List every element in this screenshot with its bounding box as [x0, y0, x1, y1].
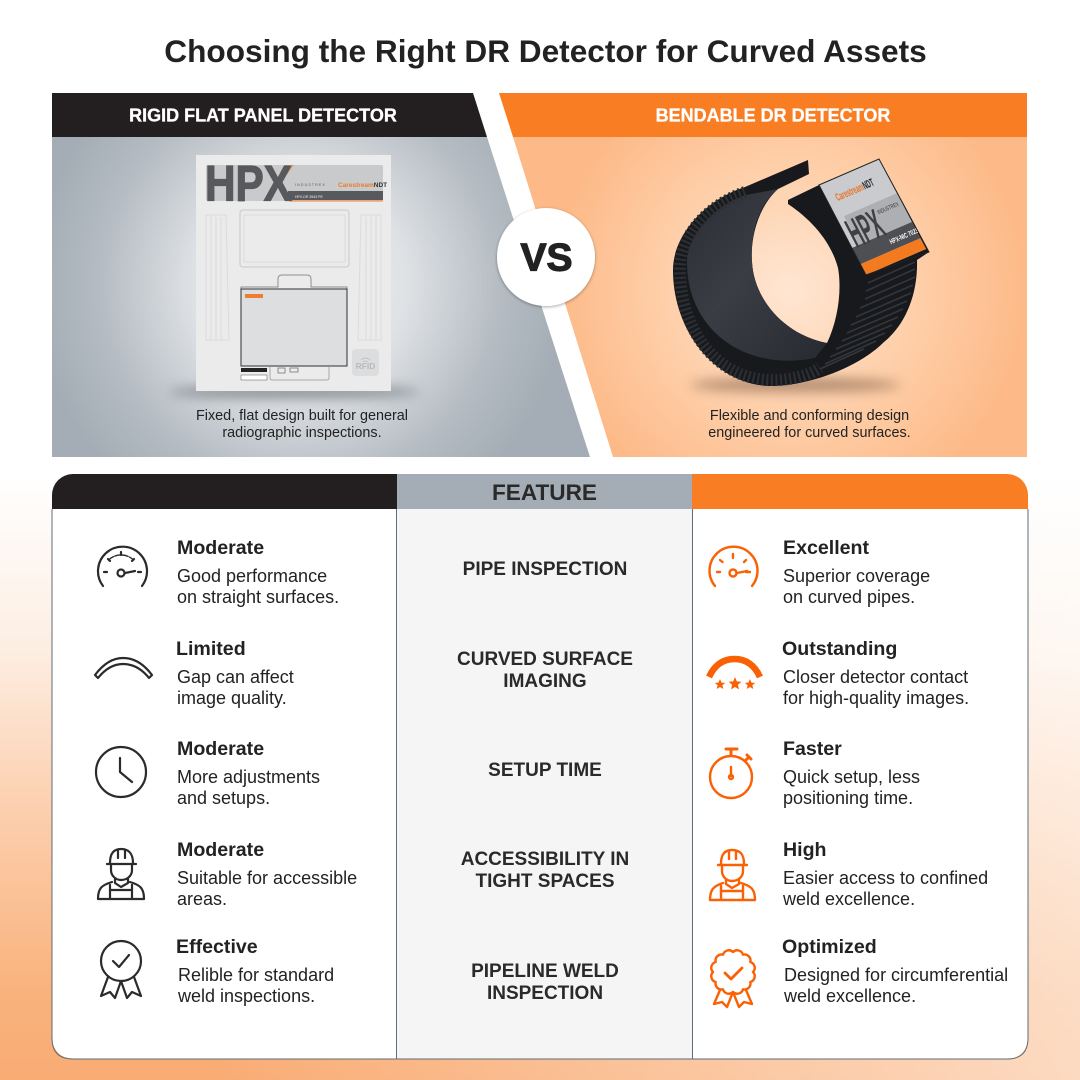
caption: rigid: Fixed, flat design built for general: [196, 408, 408, 424]
row: pipe inspection, bendable: Excellent: [783, 537, 870, 559]
row: pipe inspection, rigid: Good performance: [177, 566, 327, 586]
caption: rigid: [196, 408, 408, 441]
VS badge: [497, 208, 595, 306]
icon: award ribbon: [101, 941, 141, 998]
feature labels: PIPELINE WELD: [471, 961, 619, 982]
row: pipeline weld, rigid: Effective: [176, 936, 258, 958]
icon: orange arc with stars: [709, 659, 760, 689]
RFID badge: RFID: [356, 361, 375, 371]
detector module card: CarestreamNDT: [833, 175, 876, 203]
row: curved surface, bendable: Outstanding: [782, 638, 897, 660]
HPX label band: HPX-DR 3543 PE: [295, 195, 323, 199]
row: pipe inspection, rigid: Moderate: [177, 537, 264, 559]
feature labels: [457, 559, 633, 1004]
image: bendable detector band: [673, 158, 929, 386]
card outline: [819, 159, 929, 275]
row: accessibility, bendable: Easier access to confined: [783, 868, 988, 888]
detector module card: HPX-NIC 7023: [889, 228, 920, 246]
caption: bendable: Flexible and conforming design: [710, 408, 909, 424]
row: pipeline weld, rigid: Relible for standard: [178, 965, 334, 985]
feature heading: FEATURE: [492, 480, 597, 505]
band inner surface: [687, 189, 827, 361]
floor shadow under band: [690, 378, 900, 392]
row: accessibility, rigid: Suitable for accessible: [177, 868, 357, 888]
icon: worker: [98, 849, 144, 899]
row: pipeline weld, bendable: [711, 936, 1008, 1007]
ribs on right side: [820, 262, 915, 369]
HPX label band: [205, 156, 387, 212]
row: setup time, rigid: and setups.: [177, 788, 270, 808]
panel: rigid flat panel detector: [52, 93, 590, 457]
row: accessibility, rigid: Moderate: [177, 839, 264, 861]
feature labels: IMAGING: [503, 671, 587, 692]
row: curved surface, rigid: image quality.: [177, 688, 287, 708]
caption: bendable: engineered for curved surfaces.: [708, 425, 911, 441]
detector module card: INDUSTREX: [876, 201, 901, 217]
band silhouette: [673, 159, 929, 386]
icon: gauge: [98, 547, 147, 586]
floor shadow under panel: [169, 386, 419, 398]
caption: bendable: [708, 408, 911, 441]
row: pipeline weld, bendable: Designed for circumferential: [784, 965, 1008, 985]
row: setup time, rigid: [96, 738, 320, 808]
icon: orange rosette: [711, 950, 755, 1007]
row: curved surface, bendable: [709, 638, 969, 708]
row: curved surface, rigid: Gap can affect: [177, 667, 294, 687]
row: accessibility, bendable: High: [783, 839, 827, 861]
row: pipeline weld, rigid: weld inspections.: [177, 986, 315, 1006]
table body: [52, 474, 1028, 1059]
row: curved surface, bendable: Closer detector contact: [783, 667, 968, 687]
row: curved surface, bendable: for high-quality images.: [783, 688, 969, 708]
detector module card: HPX: [839, 201, 892, 257]
row: setup time, rigid: Moderate: [177, 738, 264, 760]
row: setup time, bendable: positioning time.: [783, 788, 913, 808]
ribs along outer edge: [680, 192, 820, 380]
row: setup time, rigid: More adjustments: [177, 767, 320, 787]
row: pipeline weld, bendable: Optimized: [782, 936, 877, 958]
header: bendable: BENDABLE DR DETECTOR: [656, 106, 890, 126]
row: accessibility, rigid: [98, 839, 357, 909]
feature column background: [397, 509, 692, 1059]
row: pipe inspection, bendable: on curved pipes.: [783, 587, 915, 607]
panel: bendable DR detector: [499, 93, 1027, 457]
caption: rigid: radiographic inspections.: [222, 425, 382, 441]
HPX label band: HPX: [205, 156, 292, 212]
feature labels: SETUP TIME: [488, 760, 602, 781]
row: pipe inspection, rigid: on straight surfaces.: [177, 587, 339, 607]
feature labels: PIPE INSPECTION: [463, 559, 627, 580]
row: setup time, bendable: [710, 738, 920, 808]
feature labels: CURVED SURFACE: [457, 649, 633, 670]
HPX label band: CarestreamNDT: [338, 182, 387, 189]
HPX label band: INDUSTREX: [295, 183, 326, 187]
row: curved surface, rigid: Limited: [176, 638, 246, 660]
row: setup time, bendable: Quick setup, less: [783, 767, 920, 787]
header: rigid flat panel: [52, 93, 487, 137]
table outline and column rules: [52, 509, 1028, 1059]
icon: orange gauge: [709, 547, 758, 586]
row: pipeline weld, rigid: [101, 936, 334, 1006]
row: pipe inspection, bendable: [709, 537, 930, 607]
table header row: [52, 474, 1028, 509]
row: accessibility, rigid: areas.: [177, 889, 227, 909]
icon: curved gap arc: [95, 658, 152, 678]
feature labels: INSPECTION: [487, 983, 603, 1004]
row: accessibility, bendable: weld excellence.: [782, 889, 915, 909]
comparison table: [52, 474, 1028, 1059]
icon: orange worker: [710, 850, 755, 900]
detector module card: [819, 158, 928, 275]
row: pipe inspection, bendable: Superior coverage: [783, 566, 930, 586]
icon: clock: [96, 747, 146, 797]
header: rigid flat panel: RIGID FLAT PANEL DETECTOR: [129, 106, 397, 126]
row: pipe inspection, rigid: [98, 537, 339, 607]
row: curved surface, rigid: [95, 638, 294, 708]
row: setup time, bendable: Faster: [783, 738, 842, 760]
VS badge: VS: [520, 236, 573, 280]
feature labels: TIGHT SPACES: [476, 871, 614, 892]
feature labels: ACCESSIBILITY IN: [461, 849, 629, 870]
RFID badge: [352, 349, 379, 376]
title: Choosing the Right DR Detector for Curved Assets: [164, 33, 927, 69]
image: HPX rigid detector: [196, 155, 391, 391]
detector plate: [241, 275, 347, 380]
icon: orange stopwatch: [710, 749, 752, 798]
header: bendable: [499, 93, 1027, 137]
row: accessibility, bendable: [710, 839, 988, 909]
embossed side ridges and upper recess: [206, 210, 381, 340]
row: pipeline weld, bendable: weld excellence.: [783, 986, 916, 1006]
